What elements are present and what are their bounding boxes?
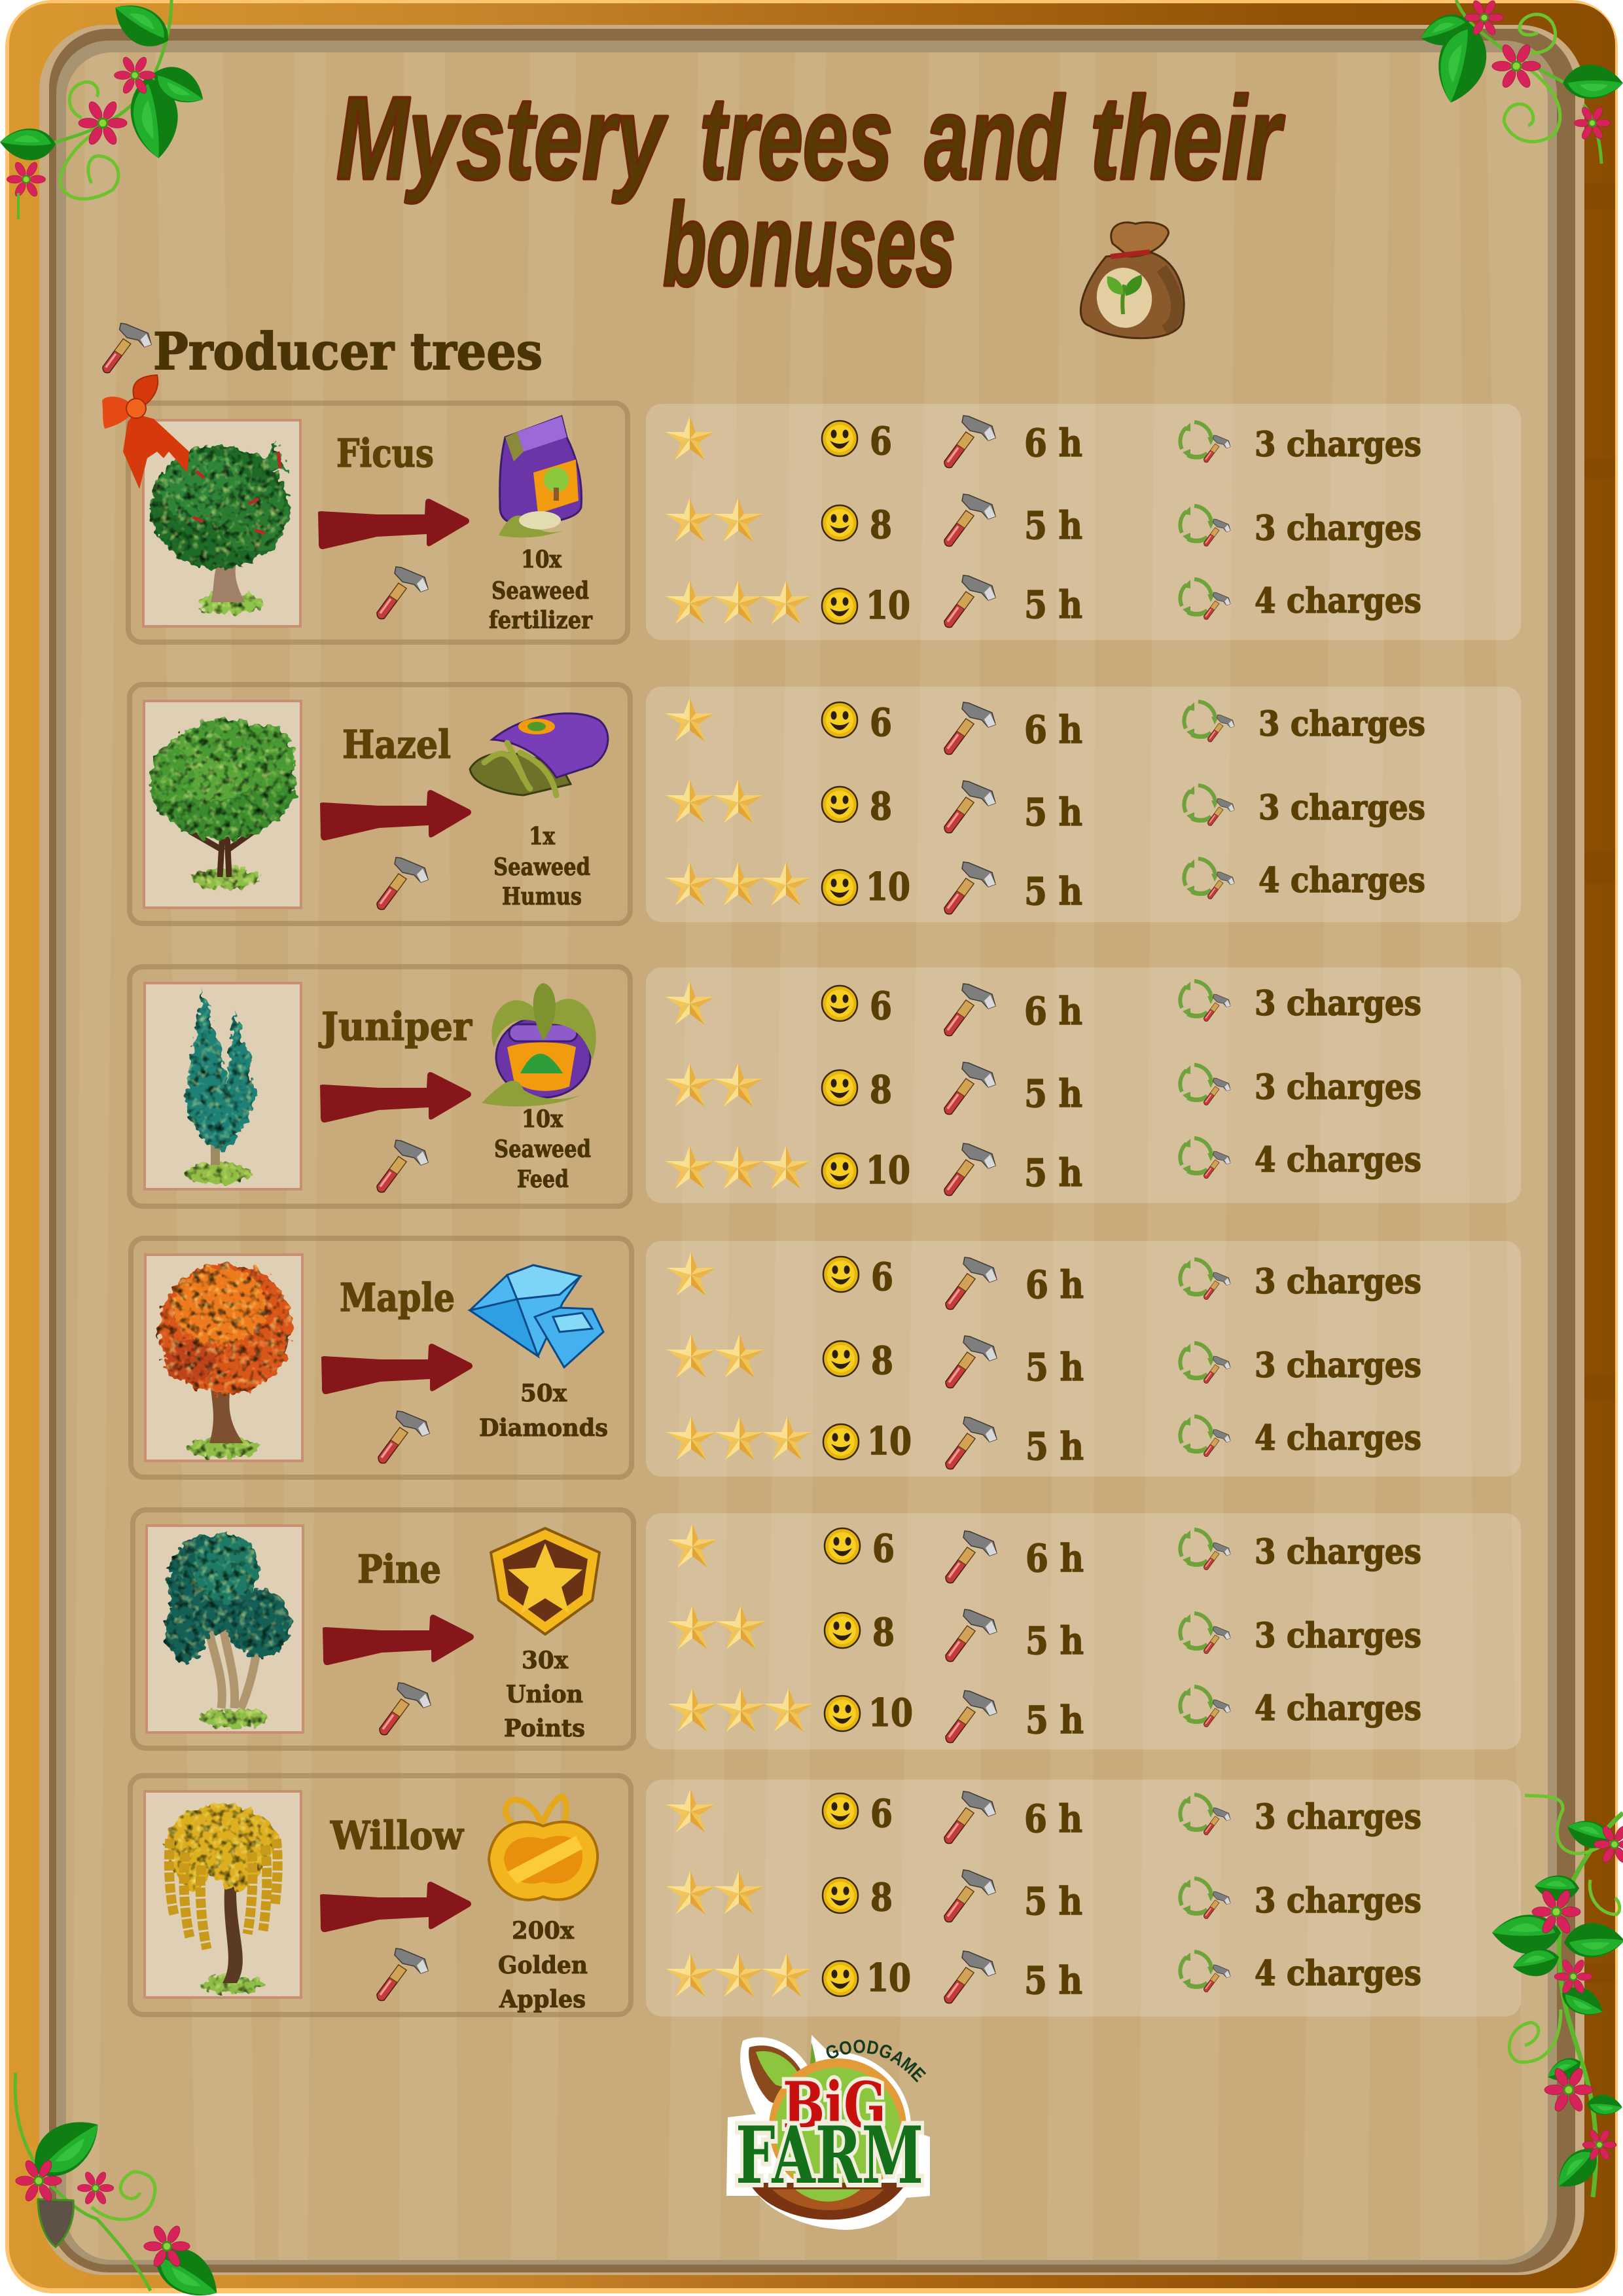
- charges: [1180, 1259, 1421, 1458]
- logo: Goodgame Big Farm: BiG: [783, 2068, 886, 2142]
- production times: 5 h: [1026, 1424, 1084, 1469]
- production times: 6 h: [1024, 989, 1082, 1033]
- tree card: Maple: [145, 1255, 302, 1461]
- tree name: Willow: [330, 1813, 464, 1858]
- production times: 5 h: [1024, 503, 1082, 548]
- vine decoration: bottom right: [1492, 1795, 1623, 2197]
- star levels and happiness: 6: [870, 984, 892, 1028]
- charges: 3 charges: [1255, 1616, 1421, 1656]
- charges: 3 charges: [1258, 704, 1425, 744]
- production times: 5 h: [1024, 790, 1082, 834]
- reward label: Points: [504, 1715, 585, 1742]
- reward label: [479, 1380, 608, 1442]
- charges: 3 charges: [1255, 1532, 1421, 1572]
- star levels and happiness: 8: [872, 1610, 895, 1655]
- star levels and happiness: 8: [870, 1875, 893, 1920]
- reward label: 1x: [529, 823, 555, 850]
- tree name: Juniper: [318, 1004, 473, 1049]
- reward label: Feed: [517, 1166, 569, 1193]
- reward label: 50x: [520, 1380, 567, 1407]
- arrow: [321, 1344, 473, 1394]
- title: and: [925, 73, 1066, 204]
- charges: 3 charges: [1255, 1797, 1421, 1837]
- title: [336, 73, 1285, 311]
- star levels and happiness: 10: [866, 865, 910, 909]
- icon: golden apple: [489, 1797, 597, 1900]
- reward label: [489, 546, 593, 634]
- heading: Producer trees: Producer trees: [153, 322, 543, 382]
- production times: 6 h: [1026, 1263, 1084, 1307]
- title: trees: [700, 73, 893, 204]
- star levels and happiness: [665, 416, 910, 628]
- reward label: Apples: [499, 1986, 586, 2013]
- charges: 3 charges: [1255, 1346, 1421, 1386]
- charges: 3 charges: [1255, 509, 1421, 548]
- arrow: [320, 1072, 471, 1122]
- charges: 4 charges: [1255, 1418, 1421, 1458]
- star levels and happiness: [666, 1789, 911, 2000]
- icon: hammer: [377, 857, 428, 910]
- charges: [1180, 422, 1421, 621]
- icon: hammer: [378, 1411, 429, 1463]
- production times: [944, 702, 1082, 914]
- reward label: [498, 1917, 588, 2013]
- vine decoration: top left: [0, 0, 211, 219]
- production times: [944, 984, 1082, 1196]
- tree name: Pine: [357, 1547, 441, 1592]
- panel: Maple tree: [131, 1238, 632, 1477]
- arrow: [320, 1882, 471, 1932]
- charges: [1180, 1530, 1421, 1729]
- production times: 5 h: [1024, 1958, 1082, 2003]
- icon: diamonds: [470, 1265, 603, 1367]
- charges: [1180, 981, 1421, 1180]
- tree name: Maple: [340, 1275, 455, 1320]
- reward label: [504, 1647, 585, 1742]
- reward label: 10x: [522, 1105, 563, 1133]
- star levels and happiness: [665, 698, 910, 909]
- charges: [1180, 1795, 1421, 1994]
- icon: hammer: [380, 1683, 431, 1735]
- star levels and happiness: 10: [866, 1148, 910, 1193]
- production times: 5 h: [1024, 869, 1082, 914]
- star levels and happiness: 6: [870, 700, 892, 745]
- production times: [946, 1257, 1084, 1469]
- logo: Goodgame Big Farm: FARM: [736, 2109, 923, 2202]
- tree card: Ficus: [143, 420, 300, 626]
- production times: 5 h: [1024, 1071, 1082, 1116]
- tree name: Hazel: [342, 722, 451, 767]
- charges: 3 charges: [1255, 1881, 1421, 1921]
- reward label: fertilizer: [489, 607, 593, 634]
- tree card: Willow: [145, 1791, 301, 1998]
- star levels and happiness: 10: [866, 1956, 911, 2000]
- title: their: [1090, 73, 1285, 204]
- logo: Goodgame Big Farm: [726, 2035, 930, 2230]
- star levels and happiness: 6: [872, 1526, 895, 1571]
- star levels and happiness: 8: [870, 784, 892, 829]
- charges: 3 charges: [1255, 1262, 1421, 1302]
- production times: 5 h: [1026, 1698, 1084, 1742]
- production times: [946, 1531, 1084, 1743]
- production times: 6 h: [1026, 1536, 1084, 1581]
- title: bonuses: [663, 179, 955, 311]
- charges: 3 charges: [1258, 788, 1425, 828]
- production times: 5 h: [1024, 583, 1082, 627]
- arrow: [318, 499, 469, 549]
- icon: union points badge: [491, 1528, 599, 1634]
- production times: 6 h: [1024, 1797, 1082, 1841]
- logo: Goodgame Big Farm: GOODGAME: [826, 2039, 927, 2083]
- panel: Ficus tree: [102, 375, 628, 642]
- panel: Juniper tree: [130, 967, 630, 1206]
- star levels and happiness: 10: [866, 583, 910, 628]
- icon: hammer: [377, 1948, 428, 2001]
- icon: seaweed feed jar: [482, 983, 596, 1107]
- star levels and happiness: 10: [867, 1419, 912, 1463]
- star levels and happiness: [666, 1252, 912, 1463]
- reward label: [493, 823, 590, 910]
- tree card: Juniper: [145, 983, 301, 1189]
- icon: hammer: [377, 1140, 428, 1193]
- production times: 5 h: [1024, 1151, 1082, 1195]
- star levels and happiness: 8: [870, 503, 892, 547]
- reward label: Seaweed: [491, 577, 589, 605]
- reward label: Seaweed: [493, 853, 590, 881]
- reward label: Seaweed: [494, 1136, 591, 1163]
- reward label: Golden: [498, 1952, 588, 1979]
- production times: 6 h: [1024, 421, 1082, 465]
- reward label: [494, 1105, 591, 1193]
- star levels and happiness: 6: [870, 419, 892, 463]
- charges: 4 charges: [1255, 1954, 1421, 1994]
- production times: [944, 1791, 1082, 2003]
- panel: Hazel tree: [130, 685, 630, 924]
- panel: Juniper stats: [646, 967, 1521, 1203]
- production times: 5 h: [1026, 1619, 1084, 1663]
- arrow: [323, 1615, 474, 1665]
- title: Mystery: [336, 73, 668, 204]
- panel: Pine stats: [646, 1513, 1521, 1749]
- icon: hammer: [377, 567, 428, 619]
- icon: seed bag: [1080, 223, 1184, 338]
- panel: Maple stats: [646, 1241, 1521, 1477]
- star levels and happiness: 8: [870, 1067, 892, 1112]
- charges: 3 charges: [1255, 425, 1421, 465]
- production times: 5 h: [1024, 1879, 1082, 1924]
- star levels and happiness: 6: [871, 1255, 893, 1299]
- panel: Pine tree: [133, 1510, 633, 1748]
- icon: red ribbon bow: [102, 375, 189, 489]
- reward label: Diamonds: [479, 1414, 608, 1442]
- star levels and happiness: 10: [868, 1691, 913, 1735]
- reward label: 30x: [522, 1647, 569, 1674]
- reward label: 10x: [521, 546, 562, 573]
- vine decoration: top right: [1417, 0, 1623, 164]
- tree name: Ficus: [336, 431, 434, 476]
- reward label: Union: [506, 1681, 583, 1708]
- star levels and happiness: [668, 1524, 913, 1735]
- production times: 5 h: [1026, 1345, 1084, 1390]
- star levels and happiness: [665, 981, 910, 1193]
- panel: Hazel stats: [646, 687, 1521, 922]
- tree card: Pine: [147, 1526, 303, 1732]
- charges: 3 charges: [1255, 984, 1421, 1024]
- icon: seaweed fertilizer bag: [499, 416, 582, 537]
- panel: Willow tree: [130, 1776, 631, 2015]
- reward label: Humus: [502, 883, 582, 910]
- charges: [1184, 702, 1425, 901]
- charges: 4 charges: [1255, 1689, 1421, 1729]
- panel: Willow stats: [646, 1780, 1521, 2017]
- panel: Ficus stats: [646, 404, 1521, 640]
- icon: seaweed humus sack: [470, 713, 608, 795]
- charges: 4 charges: [1255, 581, 1421, 621]
- star levels and happiness: 6: [870, 1791, 893, 1836]
- reward label: 200x: [512, 1917, 575, 1945]
- production times: 6 h: [1024, 708, 1082, 752]
- vine decoration: bottom left: [15, 2073, 228, 2296]
- tree card: Hazel: [144, 701, 301, 908]
- charges: 4 charges: [1258, 861, 1425, 901]
- star levels and happiness: 8: [871, 1338, 893, 1383]
- production times: [944, 416, 1082, 628]
- charges: 4 charges: [1255, 1140, 1421, 1180]
- charges: 3 charges: [1255, 1067, 1421, 1107]
- arrow: [320, 790, 471, 840]
